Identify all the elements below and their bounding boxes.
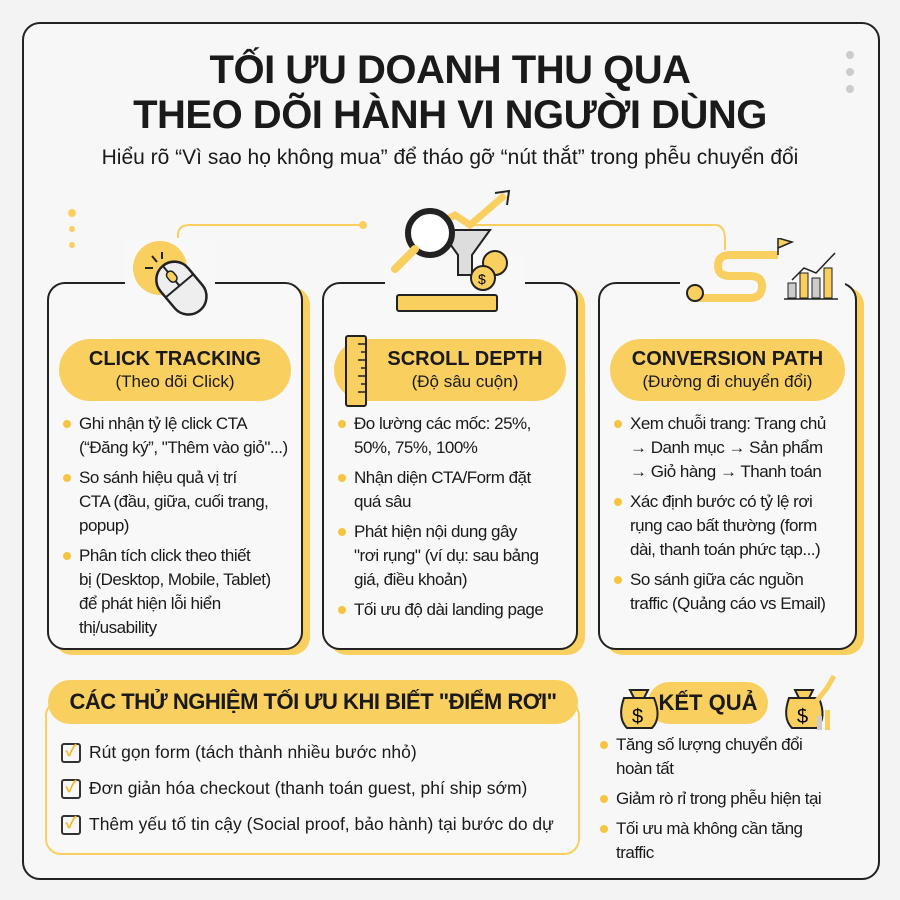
icon: magnifier funnel coins [385, 190, 525, 312]
pill heading [334, 339, 566, 401]
pill heading [59, 339, 291, 401]
bullets: Phân tích click theo thiết [79, 546, 250, 565]
panel: results [600, 674, 836, 862]
icon: mouse [125, 238, 215, 316]
bullets: 50%, 75%, 100% [354, 438, 477, 457]
bullets [614, 414, 826, 613]
checklist: Rút gọn form (tách thành nhiều bước nhỏ) [89, 742, 417, 762]
pill heading: CONVERSION PATH [632, 348, 823, 370]
icon: money bags: $ [797, 706, 808, 728]
checklist: Thêm yếu tố tin cậy (Social proof, bảo hành) tại bước do dự [89, 814, 554, 834]
bullets: So sánh hiệu quả vị trí [79, 468, 237, 487]
results heading [648, 682, 768, 724]
results bullets: Tối ưu mà không cần tăng [616, 819, 802, 838]
checklist [61, 742, 554, 835]
icon: magnifier funnel coins: $ [478, 271, 486, 287]
panel: experiments [45, 700, 580, 855]
bullets: Đo lường các mốc: 25%, [354, 414, 531, 433]
icon: money bags: $ [632, 706, 643, 728]
bullets: → Danh mục → Sản phẩm [630, 438, 823, 457]
bullets: Tối ưu độ dài landing page [354, 600, 543, 619]
results bullets: Tăng số lượng chuyển đổi [616, 735, 802, 754]
bullets: So sánh giữa các nguồn [630, 570, 803, 589]
bullets: để phát hiện lỗi hiển [79, 594, 221, 613]
bullets: Xem chuỗi trang: Trang chủ [630, 414, 826, 433]
subtitle: Hiểu rõ “Vì sao họ không mua” để tháo gỡ “nút thắt” trong phễu chuyển đổi [102, 146, 798, 169]
bullets: dài, thanh toán phức tạp...) [630, 540, 820, 559]
bullets: Nhận diện CTA/Form đặt [354, 468, 531, 487]
pill heading: (Theo dõi Click) [115, 372, 235, 391]
pill heading: CLICK TRACKING [89, 348, 261, 370]
bullets: CTA (đầu, giữa, cuối trang, [79, 492, 268, 511]
pill heading: SCROLL DEPTH [387, 348, 543, 370]
panel: scroll depth [322, 282, 578, 650]
bullets: bị (Desktop, Mobile, Tablet) [79, 570, 271, 589]
bullets: Ghi nhận tỷ lệ click CTA [79, 414, 247, 433]
title [133, 47, 767, 137]
bullets: quá sâu [354, 492, 411, 511]
results heading: KẾT QUẢ [658, 690, 758, 715]
bullets: popup) [79, 516, 129, 535]
bullets: Phát hiện nội dung gây [354, 522, 517, 541]
bullets [338, 414, 544, 619]
results bullets: hoàn tất [616, 759, 673, 778]
bullets [63, 414, 288, 637]
checklist: Đơn giản hóa checkout (thanh toán guest, phí ship sớm) [89, 778, 527, 798]
panel: conversion path [598, 282, 857, 650]
bullets: (“Đăng ký”, "Thêm vào giỏ"...) [79, 438, 288, 457]
icon: ruler [345, 335, 367, 407]
panel: click tracking [47, 282, 303, 650]
title: THEO DÕI HÀNH VI NGƯỜI DÙNG [133, 93, 767, 137]
bullets: → Giỏ hàng → Thanh toán [630, 462, 821, 481]
title: TỐI ƯU DOANH THU QUA [210, 48, 690, 92]
bullets: rụng cao bất thường (form [630, 516, 817, 535]
bullets: giá, điều khoản) [354, 570, 467, 589]
results bullets: Giảm rò rỉ trong phễu hiện tại [616, 789, 821, 808]
bullets: traffic (Quảng cáo vs Email) [630, 594, 825, 613]
results bullets [600, 735, 821, 862]
bullets: Xác định bước có tỷ lệ rơi [630, 492, 812, 511]
connector line [68, 51, 854, 250]
results bullets: traffic [616, 843, 654, 862]
icon: money bags [620, 674, 836, 730]
experiments heading: CÁC THỬ NGHIỆM TỐI ƯU KHI BIẾT "ĐIỂM RƠI" [69, 689, 557, 714]
icon: path and chart [680, 238, 845, 302]
experiments heading [48, 680, 578, 724]
bullets: thị/usability [79, 618, 157, 637]
pill heading: (Đường đi chuyển đổi) [643, 372, 812, 391]
bullets: "rơi rụng" (ví dụ: sau bảng [354, 546, 539, 565]
pill heading [610, 339, 845, 401]
pill heading: (Độ sâu cuộn) [412, 372, 518, 391]
